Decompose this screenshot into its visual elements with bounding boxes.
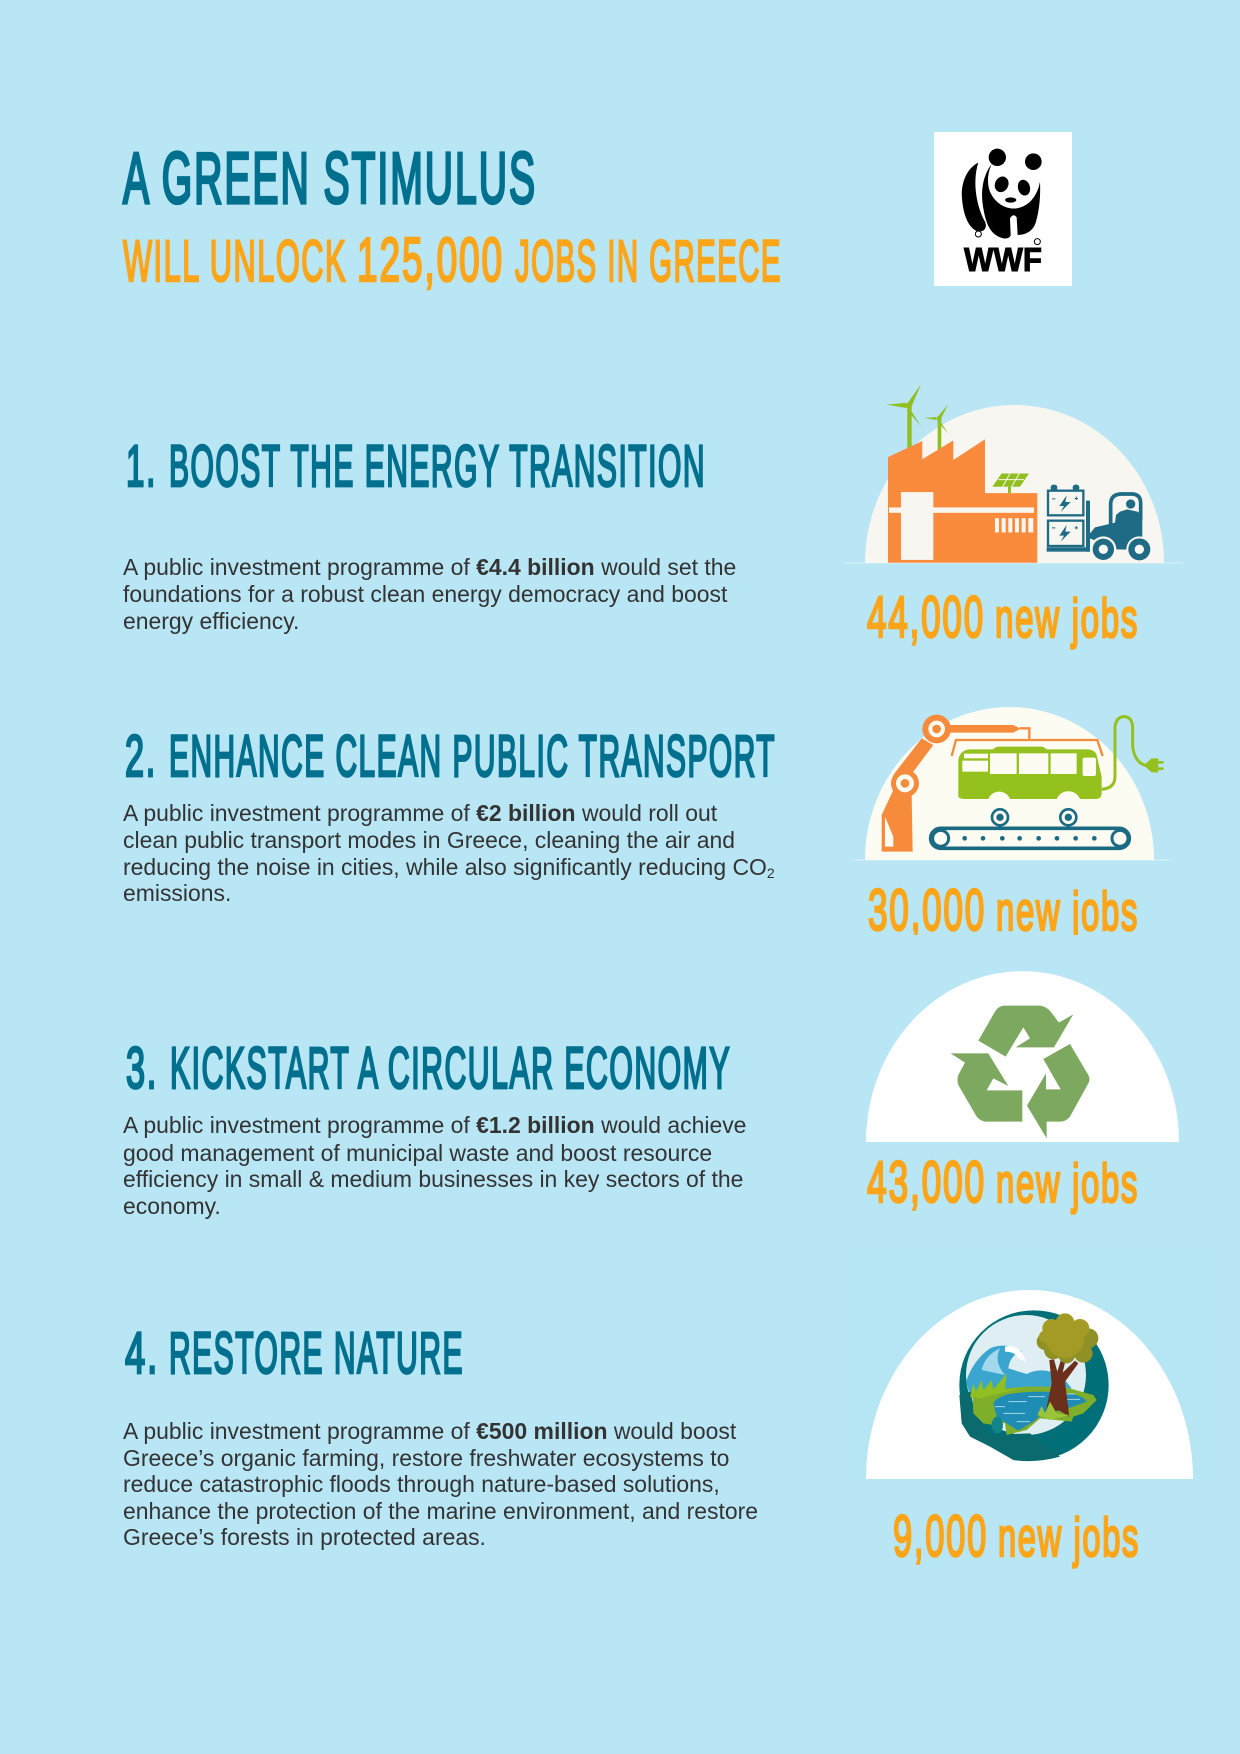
text: nature: reduce catastrophic floods through nature-based solutions, <box>123 1471 720 1497</box>
factory <box>888 439 1037 563</box>
label: 44,000 new jobs: new jobs <box>995 587 1139 649</box>
heading: circular economy: 3. <box>126 1036 158 1101</box>
solar panel <box>992 474 1029 493</box>
label: 30,000 new jobs: new jobs <box>996 880 1139 942</box>
batteries and forklift <box>1047 485 1152 562</box>
panel: nature icon <box>847 1248 1207 1480</box>
text: nature: A public investment programme of €500 million would boost <box>123 1418 737 1444</box>
title: A GREEN STIMULUS <box>123 139 537 219</box>
heading: energy: BOOST THE ENERGY TRANSITION <box>169 434 706 499</box>
conveyor <box>931 809 1129 848</box>
text: energy: foundations for a robust clean energy democracy and boost <box>123 581 728 607</box>
heading: nature <box>125 1321 464 1386</box>
panel: energy icon <box>843 380 1182 564</box>
heading: circular economy: KICKSTART A CIRCULAR ECONOMY <box>170 1036 731 1101</box>
heading: nature: 4. <box>125 1321 159 1386</box>
text: energy: energy efficiency. <box>123 608 299 634</box>
text: transport: 2 <box>767 865 775 881</box>
heading: transport <box>125 724 776 789</box>
text: transport: A public investment programme of €2 billion would roll out <box>123 800 718 826</box>
text: circular economy <box>123 1112 746 1219</box>
text: transport: clean public transport modes in Greece, cleaning the air and <box>123 827 735 853</box>
label: 43,000 new jobs: 43,000 <box>867 1150 986 1215</box>
logo: WWF panda: WWF <box>964 241 1042 278</box>
text: transport: reducing the noise in cities, while also significantly reducing CO <box>123 854 767 880</box>
text: nature: Greece’s organic farming, restore freshwater ecosystems to <box>123 1445 729 1471</box>
icon: nature globe <box>959 1310 1109 1461</box>
text: transport <box>123 800 775 906</box>
label: 9,000 new jobs <box>893 1504 1140 1569</box>
panel: transport icon <box>854 695 1170 860</box>
text: nature: enhance the protection of the marine environment, and restore <box>123 1498 758 1524</box>
text: nature: Greece’s forests in protected areas. <box>123 1524 486 1550</box>
robot arm <box>882 715 1021 852</box>
text: transport: emissions. <box>123 880 231 906</box>
label: 9,000 new jobs: new jobs <box>998 1506 1140 1568</box>
text: energy: A public investment programme of €4.4 billion would set the <box>123 554 736 580</box>
text: circular economy: good management of municipal waste and boost resource <box>123 1140 712 1166</box>
text: circular economy: A public investment programme of €1.2 billion would achieve <box>123 1112 746 1138</box>
heading: circular economy <box>126 1036 731 1101</box>
label: 43,000 new jobs: new jobs <box>996 1152 1139 1214</box>
label: 30,000 new jobs: 30,000 <box>868 878 986 943</box>
subtitle <box>123 226 782 295</box>
bus <box>958 747 1102 799</box>
panel: circular economy icon <box>850 935 1192 1142</box>
label: 44,000 new jobs: 44,000 <box>867 585 985 650</box>
text: energy <box>123 554 736 634</box>
subtitle: WILL UNLOCK <box>123 229 347 294</box>
turbines <box>887 384 948 451</box>
logo: WWF panda <box>934 132 1072 286</box>
heading: transport: 2. <box>125 724 157 789</box>
heading: energy: 1. <box>126 434 157 499</box>
icon: recycling arrows <box>951 1006 1089 1138</box>
heading: nature: RESTORE NATURE <box>169 1321 464 1386</box>
subtitle: 125,000 <box>357 226 504 295</box>
text: circular economy: efficiency in small & medium businesses in key sectors of the <box>123 1166 743 1192</box>
label: 9,000 new jobs: 9,000 <box>893 1504 988 1569</box>
subtitle: JOBS IN GREECE <box>515 229 782 294</box>
text: circular economy: economy. <box>123 1193 221 1219</box>
text: nature <box>123 1418 758 1550</box>
heading: energy <box>126 434 706 499</box>
cable and plug <box>1102 717 1147 789</box>
